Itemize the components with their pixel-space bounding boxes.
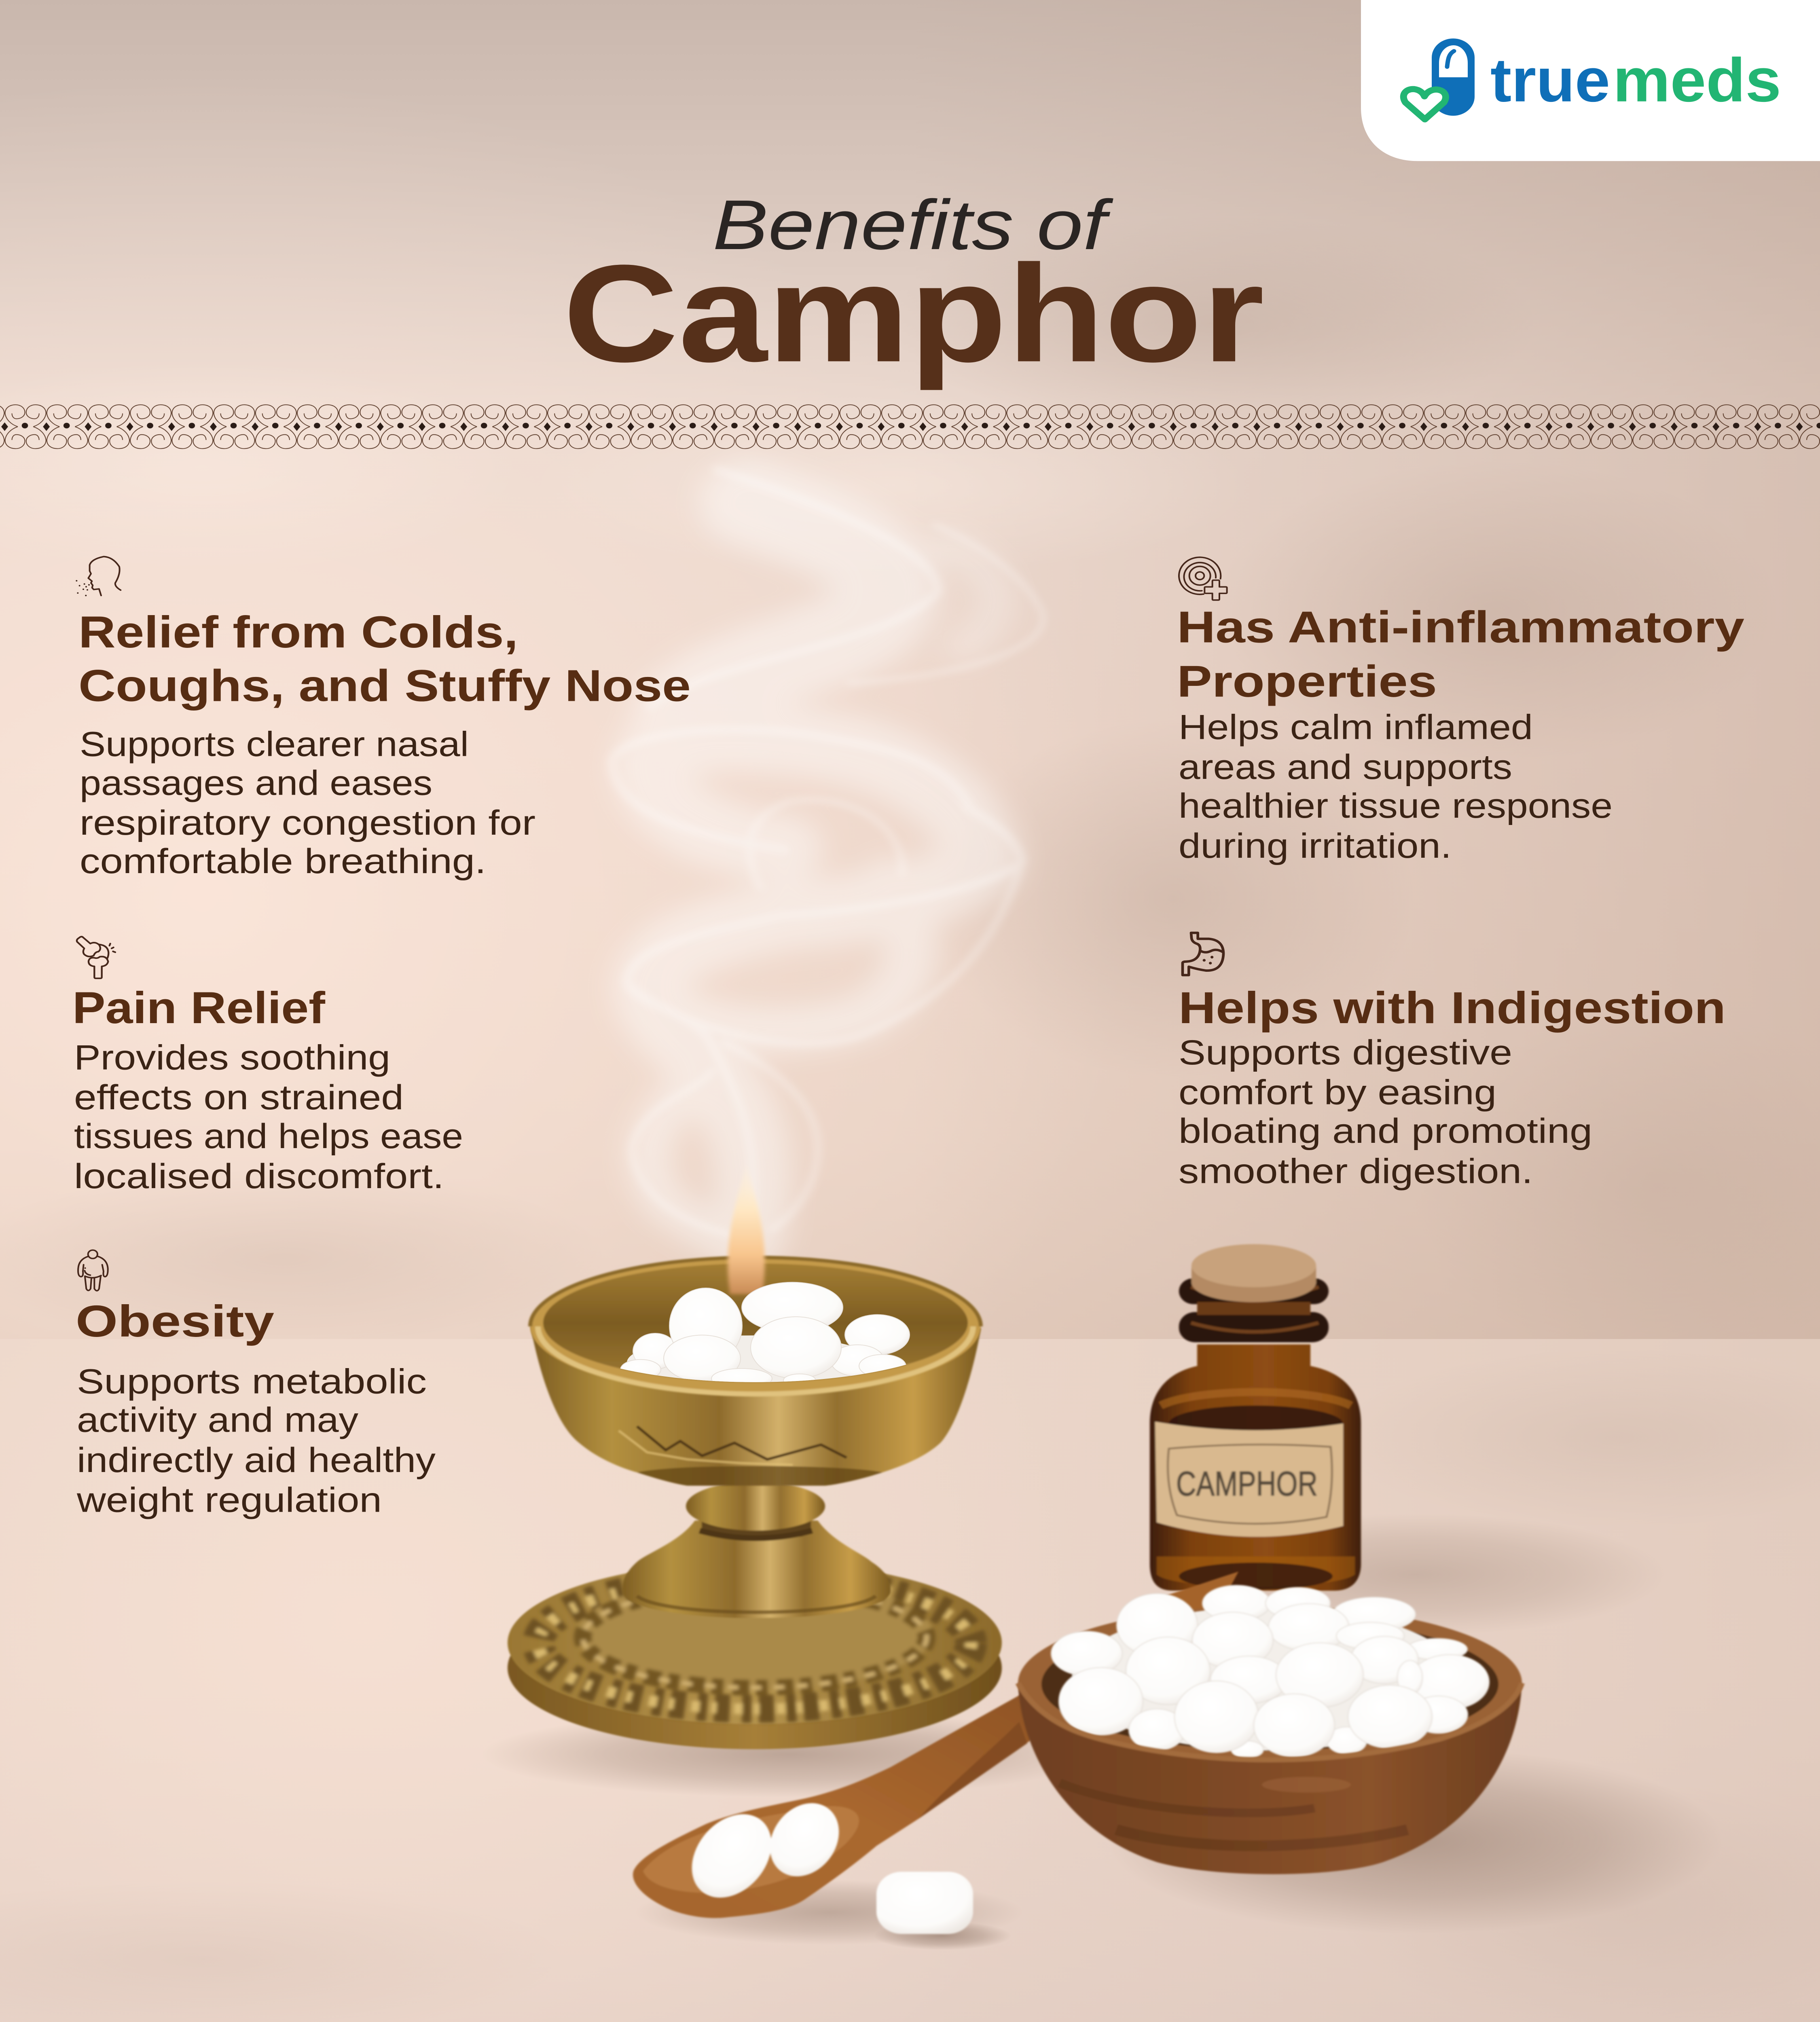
- cup: base disc: [508, 1561, 1002, 1749]
- description: indirectly aid healthy: [77, 1441, 436, 1480]
- bowl: front wall: [1018, 1683, 1522, 1874]
- description: [80, 725, 535, 881]
- bottle: cork stopper: [1191, 1244, 1316, 1302]
- brass cup with burning camphor: [508, 1163, 1002, 1749]
- cup: bowl body: [531, 1326, 981, 1486]
- description: Supports metabolic: [77, 1362, 427, 1401]
- smoke plume: [612, 470, 1043, 1251]
- title: Camphor: [563, 236, 1264, 391]
- wooden spoon with camphor tablets: [633, 1571, 1238, 1918]
- description: tissues and helps ease: [74, 1117, 463, 1156]
- icon: target with plus: [1179, 557, 1227, 600]
- description: [74, 1038, 463, 1196]
- description: during irritation.: [1179, 827, 1452, 865]
- wooden bowl of camphor tablets: [1018, 1585, 1522, 1874]
- description: [1179, 1033, 1592, 1191]
- description: [76, 1362, 436, 1519]
- bowl: camphor tablets: [1051, 1585, 1489, 1758]
- amber camphor bottle: [1150, 1244, 1361, 1591]
- cup: foot and stem: [622, 1482, 891, 1618]
- decorative ornament band: [0, 402, 1820, 452]
- heading: Relief from Colds,: [78, 607, 518, 657]
- background: table surface: [0, 1339, 1820, 2022]
- description: respiratory congestion for: [80, 804, 535, 842]
- description: Provides soothing: [74, 1038, 390, 1077]
- loose camphor tablet: [876, 1872, 973, 1934]
- bottle: paper label: CAMPHOR: [1176, 1465, 1318, 1503]
- icon: joint: [77, 937, 115, 978]
- tablets in the spoon: [676, 1793, 852, 1910]
- logo: wordmark: true: [1490, 46, 1610, 115]
- camphor pieces in the cup: [620, 1282, 910, 1390]
- benefit: anti-inflammatory: [1177, 557, 1744, 865]
- cup: rim and interior: [530, 1257, 981, 1396]
- cup: engraved floral rings: [538, 1578, 971, 1709]
- heading: Coughs, and Stuffy Nose: [78, 661, 691, 711]
- bottle: glass body: [1150, 1344, 1361, 1591]
- logo: wordmark: [1490, 46, 1781, 115]
- heading: [78, 607, 691, 711]
- description: weight regulation: [76, 1481, 382, 1519]
- heading: [1177, 602, 1744, 706]
- heading: Has Anti-inflammatory: [1177, 602, 1744, 652]
- description: passages and eases: [80, 764, 432, 802]
- benefit: obesity: [76, 1250, 436, 1519]
- bottle: paper label: [1155, 1422, 1343, 1537]
- description: localised discomfort.: [74, 1157, 444, 1196]
- description: areas and supports: [1179, 748, 1512, 787]
- title: Benefits of: [713, 186, 1113, 264]
- logo: wordmark: meds: [1613, 46, 1781, 115]
- description: smoother digestion.: [1179, 1152, 1533, 1191]
- description: Supports clearer nasal: [80, 725, 469, 764]
- logo panel: [1361, 0, 1820, 161]
- description: [1179, 708, 1613, 865]
- icon: head breathing: [76, 556, 121, 596]
- description: Helps calm inflamed: [1179, 708, 1533, 747]
- icon: stomach: [1183, 933, 1223, 975]
- description: comfort by easing: [1179, 1073, 1496, 1112]
- icon: person: [78, 1250, 108, 1291]
- heading: Properties: [1177, 656, 1437, 706]
- heading: Obesity: [76, 1296, 274, 1346]
- background: stone wall: [0, 0, 1820, 1366]
- benefit: pain relief: [72, 937, 463, 1196]
- description: effects on strained: [74, 1078, 404, 1117]
- benefit: indigestion: [1179, 933, 1726, 1191]
- spoon: handle and head: [633, 1571, 1238, 1918]
- description: activity and may: [77, 1400, 358, 1439]
- description: bloating and promoting: [1179, 1112, 1592, 1151]
- heading: Helps with Indigestion: [1179, 983, 1726, 1032]
- bowl: rim back and interior: [1018, 1606, 1522, 1760]
- shadows on the table: [481, 1513, 1723, 1950]
- bottle: neck rings: [1179, 1278, 1329, 1342]
- description: comfortable breathing.: [80, 842, 486, 881]
- logo: capsule icon: [1403, 38, 1475, 119]
- heading: Pain Relief: [72, 983, 326, 1032]
- description: healthier tissue response: [1179, 787, 1613, 825]
- flame: [728, 1163, 765, 1294]
- description: Supports digestive: [1179, 1033, 1512, 1072]
- benefit: relief from colds: [76, 556, 691, 881]
